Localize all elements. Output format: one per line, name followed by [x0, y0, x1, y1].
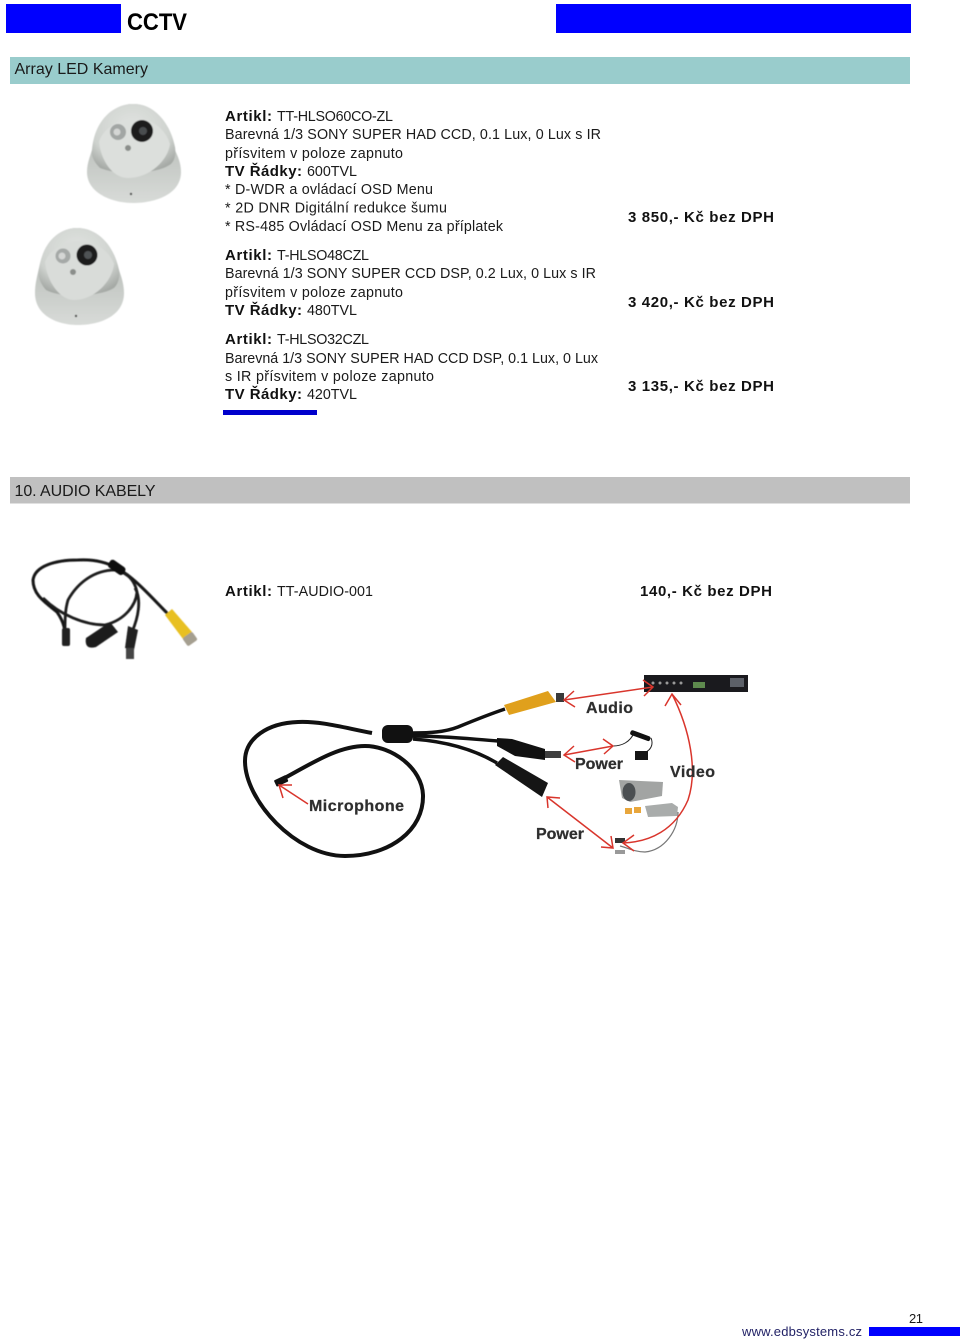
product 3 text: s IR přísvitem v poloze zapnuto — [225, 369, 434, 385]
product 1 text: TT-HLSO60CO-ZL — [277, 109, 393, 125]
product 2 text — [225, 247, 596, 319]
product 1 text: * 2D DNR Digitální redukce šumu — [225, 200, 447, 216]
arrows — [279, 680, 692, 851]
page number: 21 — [909, 1311, 923, 1326]
footer bar — [869, 1327, 960, 1336]
product 3 text: Barevná 1/3 SONY SUPER HAD CCD DSP, 0.1 Lux, 0 Lux — [225, 351, 598, 367]
power adapter — [613, 730, 652, 760]
product 2 text: přísvitem v poloze zapnuto — [225, 285, 403, 301]
label: Video: Video — [670, 764, 715, 781]
product 1 text — [225, 108, 601, 235]
product 3 text: TV Řádky: — [225, 385, 302, 403]
microphone cable — [245, 722, 423, 856]
header bar left — [6, 4, 121, 33]
product 3 text: 420TVL — [307, 387, 357, 403]
DVR device — [644, 675, 748, 692]
blue underline — [223, 410, 317, 415]
product 2 text: TV Řádky: — [225, 301, 302, 319]
photo: audio cable — [33, 559, 198, 659]
security camera — [615, 780, 678, 854]
product 2 price: 3 420,- Kč bez DPH — [628, 294, 774, 311]
artikl: audio cable: TT-AUDIO-001 — [277, 584, 373, 600]
audio cable price: 140,- Kč bez DPH — [640, 583, 772, 600]
product 3 text: T-HLSO32CZL — [277, 332, 369, 348]
label: Power: Power — [575, 756, 623, 773]
product 3 text — [225, 331, 598, 403]
product 1 text: TV Řádky: — [225, 162, 302, 180]
icon: dome camera 1 — [87, 104, 181, 203]
product 2 text: Barevná 1/3 SONY SUPER CCD DSP, 0.2 Lux, 0 Lux s IR — [225, 266, 596, 282]
microphone plug — [274, 775, 289, 787]
power socket — [413, 739, 548, 797]
product 2 text: 480TVL — [307, 303, 357, 319]
power plug — [413, 736, 561, 760]
section heading: Audio kabely — [10, 477, 910, 504]
header bar right — [556, 4, 911, 33]
section heading: Array LED Kamery — [10, 57, 910, 84]
label: Audio: Audio — [586, 700, 633, 717]
product 1 text: 600TVL — [307, 164, 357, 180]
product 1 text: Barevná 1/3 SONY SUPER HAD CCD, 0.1 Lux, 0 Lux s IR — [225, 127, 601, 143]
product 1 text: * RS-485 Ovládací OSD Menu za příplatek — [225, 219, 504, 235]
product 3 price: 3 135,- Kč bez DPH — [628, 378, 774, 395]
junction block — [382, 725, 413, 743]
product 3 text: Artikl: — [225, 331, 272, 348]
label: Microphone: Microphone — [309, 798, 404, 815]
icon: dome camera 2 — [35, 228, 124, 325]
artikl: audio cable — [225, 583, 373, 600]
product 1 price: 3 850,- Kč bez DPH — [628, 209, 774, 226]
RCA connector — [413, 691, 564, 733]
artikl: audio cable: Artikl: — [225, 583, 272, 600]
product 1 text: přísvitem v poloze zapnuto — [225, 146, 403, 162]
wiring diagram — [245, 675, 748, 856]
product 1 text: Artikl: — [225, 108, 272, 125]
section heading: Audio kabely: 10. AUDIO KABELY — [14, 483, 156, 500]
product 2 text: Artikl: — [225, 247, 272, 264]
title: CCTV — [127, 9, 187, 36]
section heading: Array LED Kamery: Array LED Kamery — [14, 61, 148, 78]
label: Power: Power — [536, 826, 584, 843]
product 2 text: T-HLSO48CZL — [277, 248, 369, 264]
product 1 text: * D-WDR a ovládací OSD Menu — [225, 182, 433, 198]
footer website: www.edbsystems.cz — [741, 1324, 862, 1339]
